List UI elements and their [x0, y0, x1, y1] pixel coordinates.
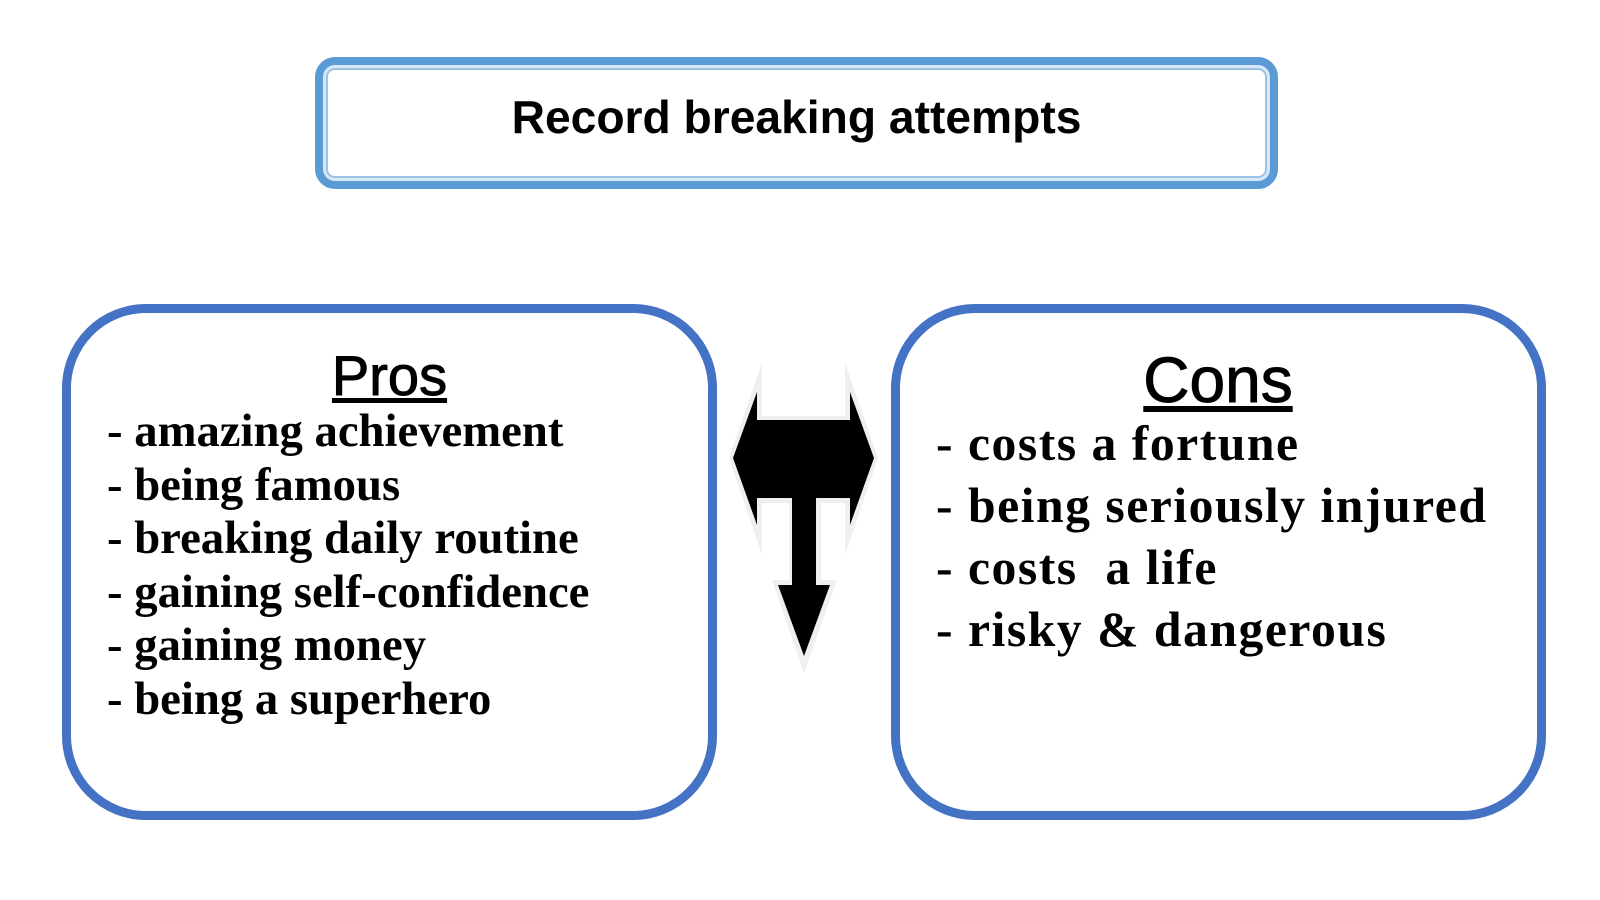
title box: [315, 57, 1278, 189]
panel: cons: [891, 304, 1546, 820]
cons list: - costs a fortune - being seriously injured - costs a life - risky & dangerous: [936, 416, 1487, 657]
icon: three-way arrow: [729, 364, 878, 672]
pros heading: Pros: [332, 344, 447, 407]
pros list: - amazing achievement - being famous - breaking daily routine - gaining self-confidence - gaining money - being a superhero: [107, 405, 589, 725]
panel: pros: [62, 304, 717, 820]
cons heading: Cons: [1143, 344, 1293, 416]
title: Record breaking attempts: [512, 91, 1081, 143]
